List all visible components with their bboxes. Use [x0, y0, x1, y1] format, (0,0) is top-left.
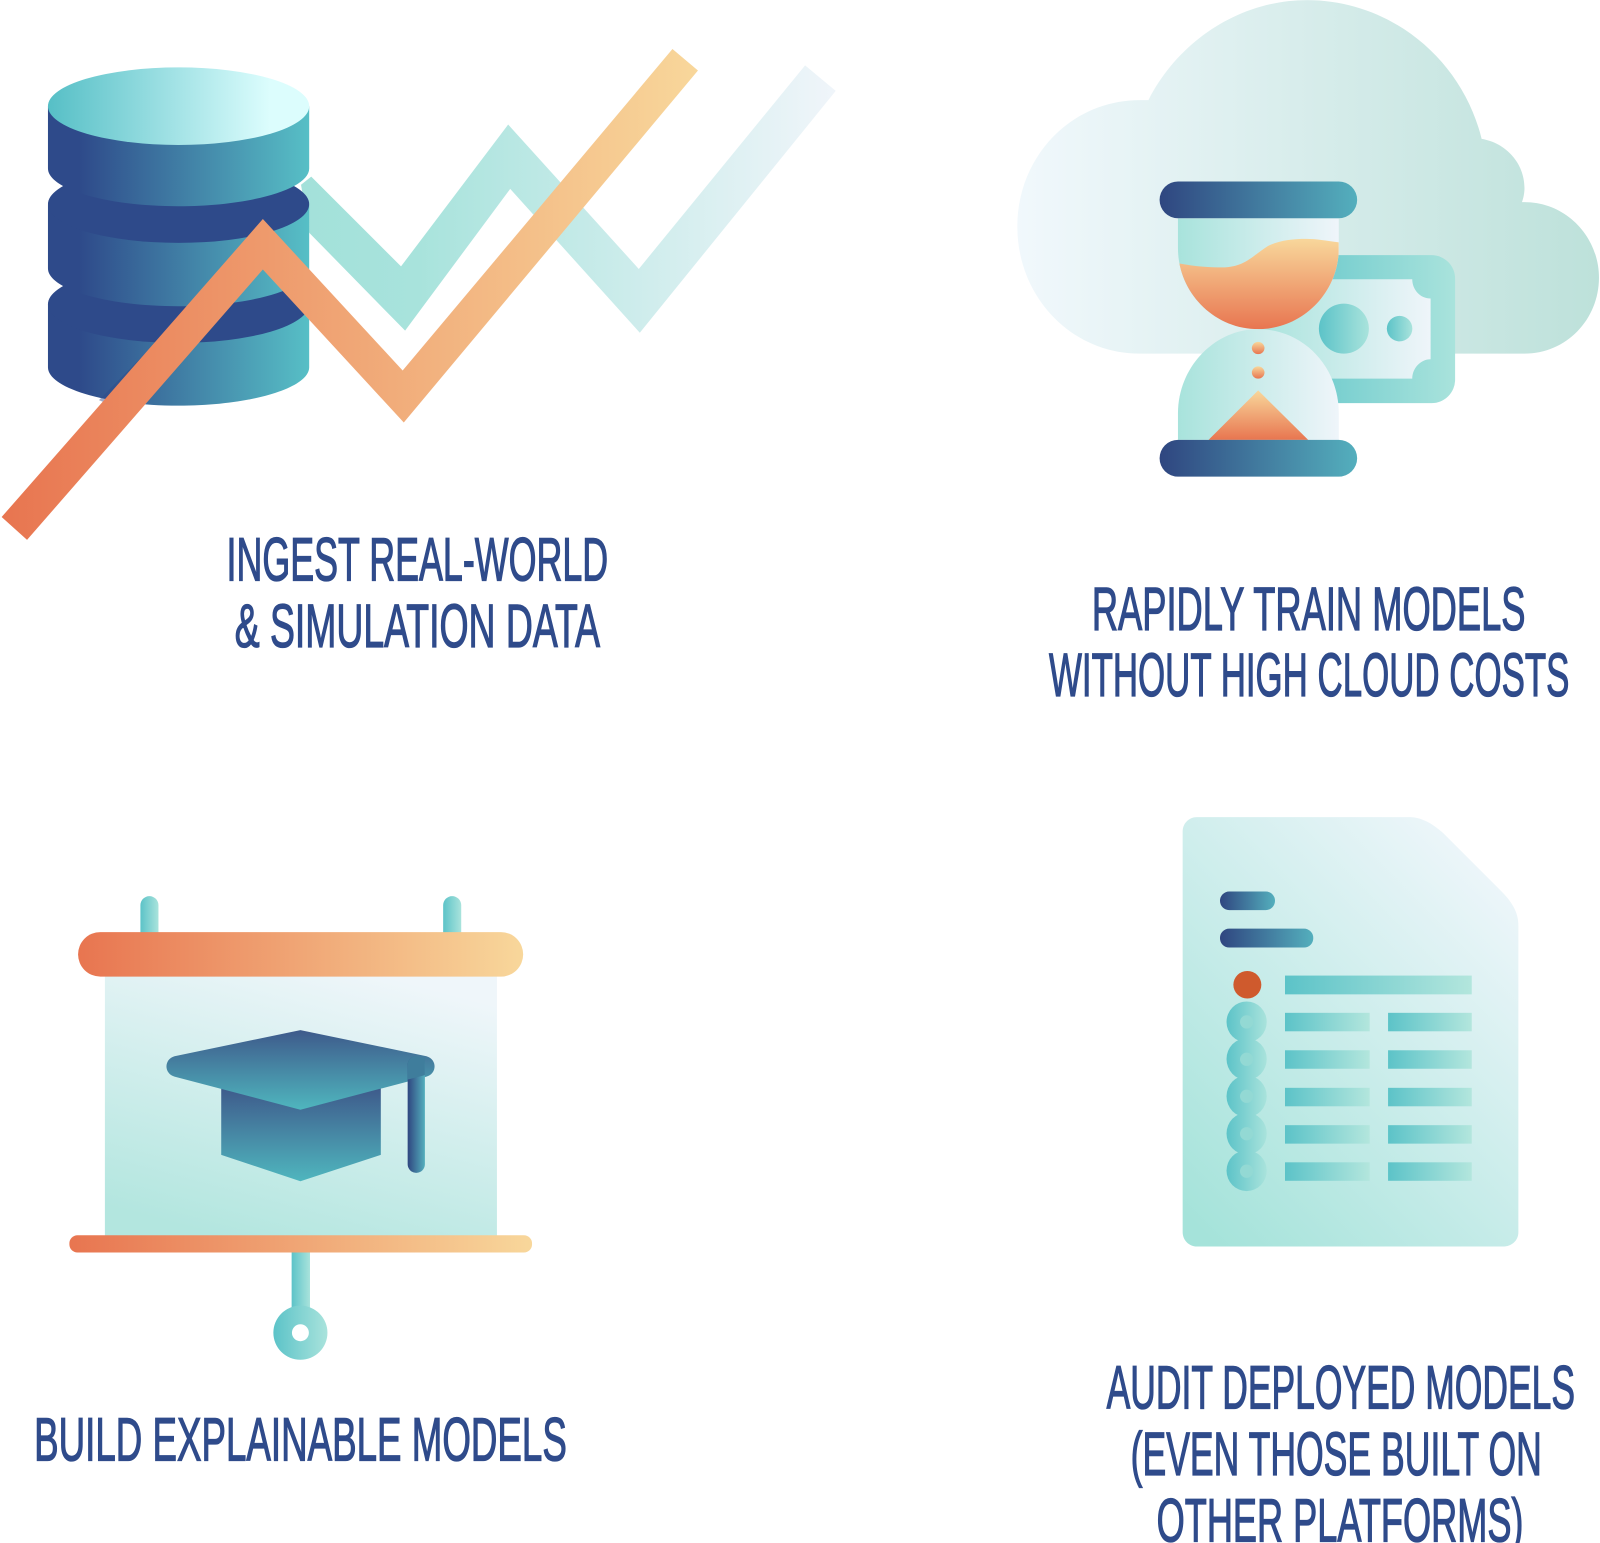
icon: banknote — [1258, 255, 1455, 403]
document table rows — [1285, 976, 1472, 1181]
icon: cloud — [1017, 0, 1599, 354]
heading: ingest data — [227, 526, 608, 660]
chart line: teal trend — [301, 65, 836, 333]
heading: train models — [1049, 575, 1569, 709]
icon: document sheet — [1183, 817, 1518, 1246]
heading: explainable models: BUILD EXPLAINABLE MODELS — [34, 1405, 567, 1473]
icon: hourglass — [1160, 182, 1357, 477]
chart line: orange trend — [2, 49, 698, 540]
heading: audit models — [1107, 1354, 1575, 1543]
icon: presentation board — [69, 896, 532, 1360]
document title bars — [1220, 892, 1313, 948]
heading: ingest data: & SIMULATION DATA — [235, 592, 600, 660]
icon: database stack — [48, 67, 309, 406]
panel: ingest data — [2, 49, 836, 660]
icon: graduation cap — [166, 1030, 435, 1181]
document beads column — [1227, 1002, 1267, 1191]
document orange marker — [1233, 971, 1261, 999]
panel: explainable models — [34, 896, 567, 1473]
panel: audit models — [1107, 817, 1575, 1543]
panel: train models — [1017, 0, 1599, 709]
heading: ingest data: INGEST REAL-WORLD — [227, 526, 608, 594]
